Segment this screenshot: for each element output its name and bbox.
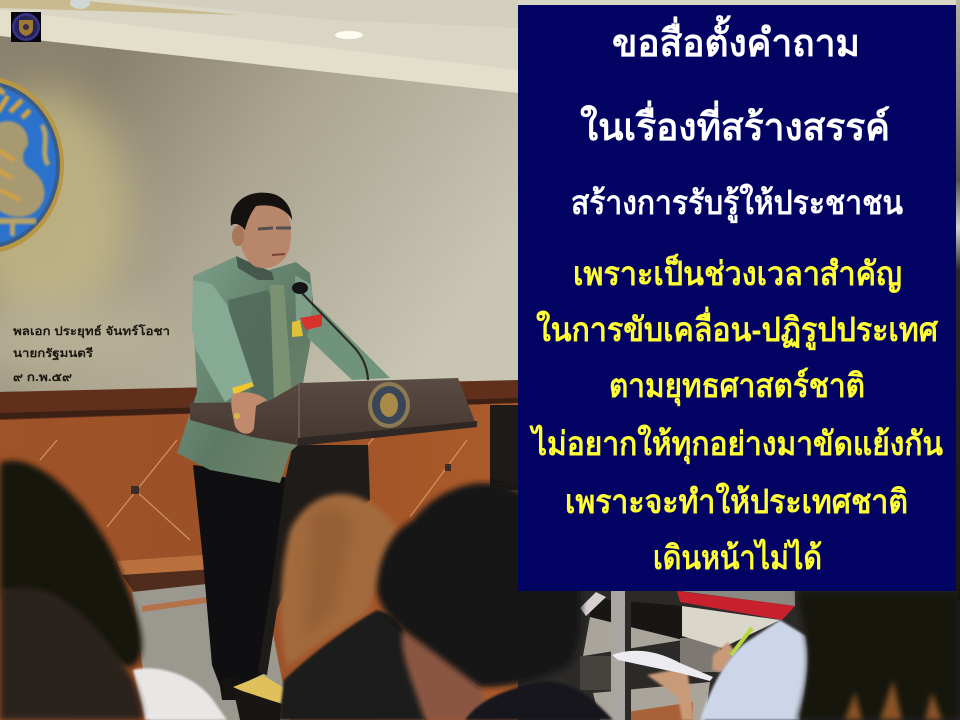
podium top	[190, 378, 477, 445]
speaker at podium	[177, 193, 477, 700]
text block: yellow lines: เดินหน้าไม่ได้	[653, 538, 822, 576]
dark block right	[490, 405, 518, 490]
head bottom-left	[0, 588, 143, 720]
glasses	[258, 228, 291, 229]
woman's reddish hair	[281, 494, 397, 667]
left sleeve	[192, 280, 253, 402]
light blue shirt	[700, 620, 808, 720]
emblem figure	[0, 88, 48, 236]
audience: foreground heads and shoulders	[0, 461, 960, 720]
microphone	[298, 289, 368, 380]
hand	[231, 392, 267, 434]
floor	[132, 578, 290, 720]
heading: white lines: ในเรื่องที่สร้างสรรค์	[580, 100, 890, 149]
podium column	[258, 445, 370, 675]
jacket body	[177, 257, 314, 483]
caption: speaker name, title and date: นายกรัฐมนตรี	[13, 347, 94, 361]
text block: yellow lines: เพราะเป็นช่วงเวลาสำคัญ	[573, 253, 902, 293]
ear and neck	[402, 630, 490, 720]
text block: yellow lines	[529, 253, 943, 576]
right edge strip	[956, 0, 960, 600]
caption: speaker name, title and date	[13, 323, 170, 384]
hands	[647, 667, 695, 720]
black shirt	[465, 682, 613, 720]
yellow paper	[233, 675, 284, 703]
podium seal	[368, 382, 410, 428]
icon: government emblem on wall	[0, 76, 64, 254]
jacket collar	[236, 256, 274, 280]
white shirt	[133, 668, 227, 720]
panel: navy statement box	[518, 5, 956, 591]
dark jacket	[279, 610, 428, 720]
back right area	[518, 590, 960, 720]
heading: white lines	[571, 15, 903, 224]
right sleeve	[307, 303, 390, 380]
caption: speaker name, title and date: พลเอก ประยุทธ์ จันทร์โอชา	[13, 323, 170, 339]
heading: white lines: สร้างการรับรู้ให้ประชาชน	[571, 183, 903, 224]
head left	[0, 461, 142, 667]
caption: speaker name, title and date: ๙ ก.พ.๕๙	[13, 372, 73, 384]
text block: yellow lines: ตามยุทธศาสตร์ชาติ	[609, 367, 865, 407]
heading: white lines: ขอสื่อตั้งคำถาม	[612, 15, 860, 65]
flower pin	[292, 314, 322, 337]
wall	[0, 36, 518, 392]
head	[238, 203, 291, 268]
ceiling light	[335, 31, 363, 39]
wood band	[0, 380, 518, 420]
pen	[731, 628, 752, 655]
trousers	[193, 465, 290, 686]
right hair	[797, 591, 960, 720]
hair	[231, 193, 292, 230]
wood panels	[0, 400, 518, 720]
text block: yellow lines: เพราะจะทำให้ประเทศชาติ	[565, 482, 908, 520]
center head hair	[377, 483, 582, 687]
icon: small seal at top-left	[11, 12, 41, 42]
ceiling	[0, 0, 960, 130]
skirting	[117, 551, 262, 575]
mouth	[272, 254, 285, 255]
bracelet	[232, 382, 254, 395]
notepad	[612, 651, 713, 681]
